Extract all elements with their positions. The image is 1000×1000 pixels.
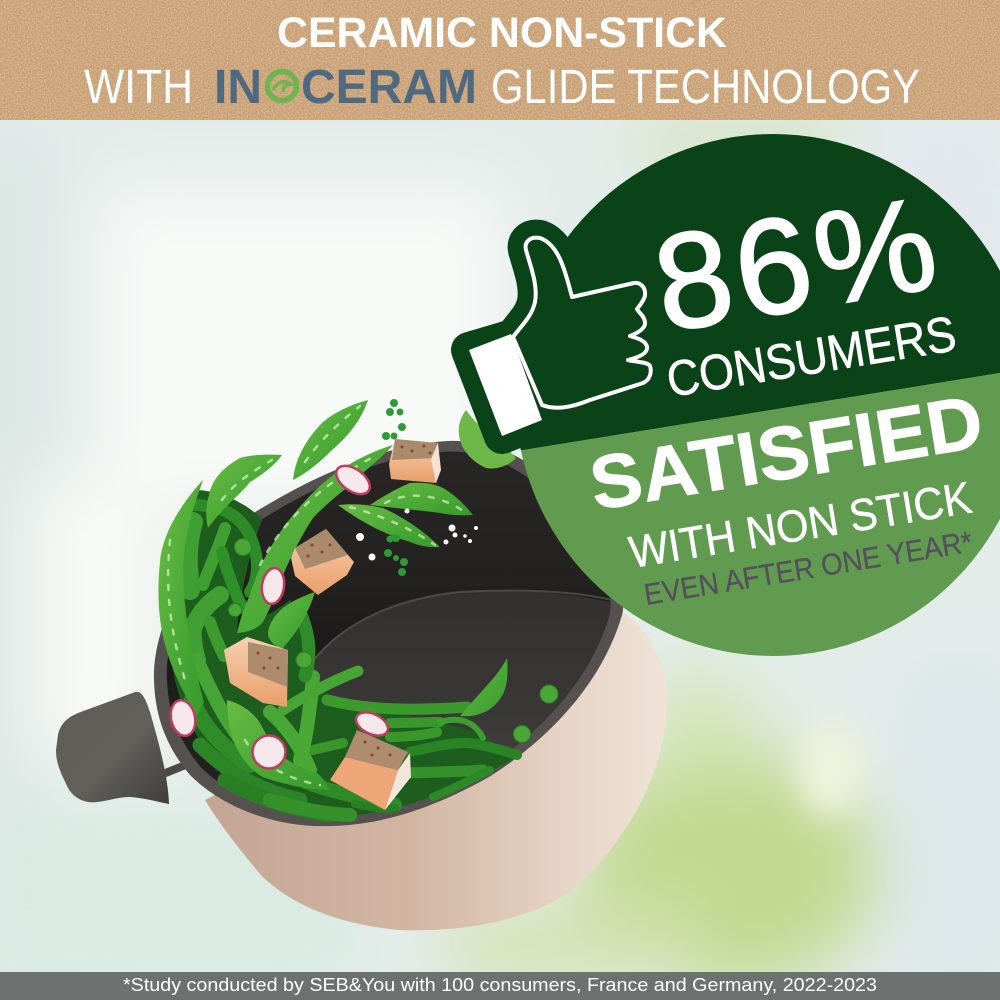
salmon cube bottom: [330, 730, 411, 810]
stat: 86%: %: [804, 169, 946, 334]
label: even after one year: EVEN AFTER ONE YEAR*: [642, 526, 975, 612]
label: with non stick: WITH NON STICK: [625, 472, 975, 578]
pan rim: [154, 441, 623, 826]
salmon cubes: [224, 439, 441, 810]
pea pod highlights: [168, 406, 465, 785]
pan body: [205, 612, 667, 930]
badge dark upper half: [520, 134, 1000, 450]
logo: inoceram: IN: [214, 61, 262, 114]
stat: 86%: [644, 169, 946, 361]
logo: inoceram: [214, 61, 477, 114]
circular badge: [469, 134, 1000, 656]
title: ceramic non-stick: CERAMIC NON-STICK: [277, 9, 727, 57]
label: satisfied: SATISFIED: [584, 379, 988, 526]
saucepan: [56, 420, 667, 930]
footnote bar: *Study conducted by SEB&You with 100 consumers, France and Germany, 2022-2023: [123, 974, 877, 995]
bean cluster backing: [168, 490, 515, 817]
beans in pan: [188, 505, 517, 815]
salmon cube middle: [291, 529, 354, 595]
subtitle: with inoceram glide technology: WITH: [84, 61, 193, 114]
radish slices: [168, 460, 392, 768]
stat: 86%: 86: [644, 185, 823, 361]
kraft paper header band: [0, 0, 1000, 120]
badge light lower half: [521, 373, 1000, 656]
footnote bar: [0, 972, 1000, 1000]
icon: thumbs up: [469, 238, 651, 436]
snap pea pods: [158, 400, 508, 790]
pan interior: [166, 452, 610, 782]
subtitle: with inoceram glide technology: [84, 61, 920, 114]
salmon cube top: [389, 439, 441, 483]
subtitle: with inoceram glide technology: GLIDE TECHNOLOGY: [491, 61, 920, 114]
label: consumers: CONSUMERS: [663, 305, 960, 408]
parsley sprigs: [382, 399, 408, 576]
peas: [228, 538, 558, 742]
pan handle: [56, 692, 190, 804]
logo: inoceram: CERAM: [301, 61, 477, 114]
salmon cube left: [224, 637, 288, 707]
salt flakes: [356, 508, 478, 560]
basil leaf: [459, 410, 516, 468]
